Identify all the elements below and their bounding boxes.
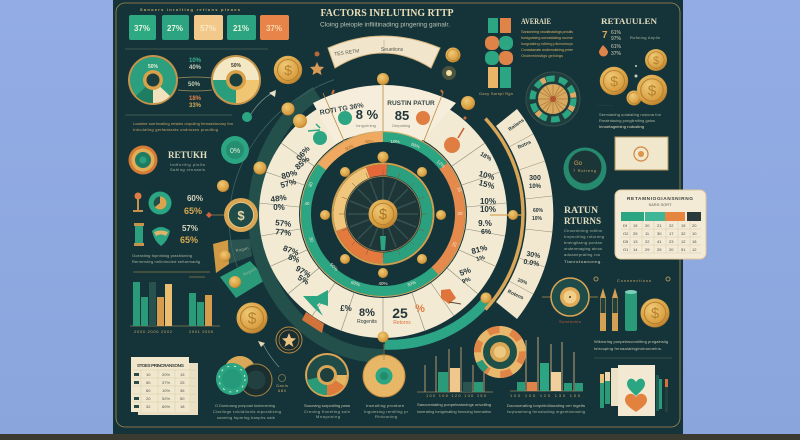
stat row 2: 65% <box>180 235 198 245</box>
icon: right orange chip on wheel <box>444 116 466 153</box>
text block: ratun returns: adoaneprating ros <box>564 252 600 257</box>
calendar table card: 20 <box>692 223 697 228</box>
bottom dial: dark <box>305 353 349 397</box>
stat rows: right: Rofining Anplis <box>630 35 660 40</box>
label: connections: Connnections <box>617 278 651 283</box>
right beige arc: Rotens <box>506 289 525 301</box>
subtitle: Cloing pleiople infliitinading pingering gainalr. <box>320 22 450 28</box>
calendar table card: 20 <box>669 247 674 252</box>
icon: sparkle <box>442 66 456 80</box>
panel: stat tiles: 37% <box>134 24 150 33</box>
tags: callouts: Rugust <box>242 265 258 277</box>
icon: green chip left <box>221 112 252 164</box>
text block: upper left note: Loanine sorrinvaling retains onpuling fernastrionary fon <box>133 121 233 126</box>
divider lines: upper left <box>125 49 268 115</box>
text block: ratun returns: Tianrotoanonng. <box>564 259 602 264</box>
text block: dial captions: Incnoiling pronturn <box>366 403 404 408</box>
chips: poker chips <box>216 356 272 396</box>
bar chart: lower left: 2000 2000 2002 <box>134 329 173 334</box>
roulette wheel: right <box>526 72 580 126</box>
ring labels: 30 <box>308 236 315 243</box>
text block: coins: Sermianing sotalating rosiona fon <box>599 112 661 117</box>
dark chip: 7 Rotreng <box>573 168 596 173</box>
wheel percent labels: 9.% <box>478 219 492 228</box>
wheel percent labels: 15% <box>478 178 496 191</box>
text block: ratun returns: bnengiiarng pontan <box>564 240 602 245</box>
table: lower left sheet: 10 <box>146 372 151 377</box>
title: FACTORS INFLUTING RTTP <box>320 8 454 19</box>
bar chart: bottom center <box>417 347 493 398</box>
calendar table card: 15 <box>681 223 686 228</box>
text block: stats note <box>132 253 200 264</box>
calendar table card: 17 <box>669 231 674 236</box>
dollar chip on outer ring <box>206 198 258 232</box>
wheel percent labels: 8% <box>287 252 301 265</box>
calendar table card: 30 <box>657 231 662 236</box>
wheel percent labels: 57% <box>279 177 297 190</box>
text block: ratun returns: onderenaging ainos <box>564 246 602 251</box>
wheel percent labels: 57% <box>275 218 292 229</box>
ring: green and orange <box>274 105 492 323</box>
table: lower left sheet: 15 <box>180 372 185 377</box>
coins: right stack: $ <box>653 55 659 67</box>
text block: coins: ...... <box>598 102 613 107</box>
coin: bottom left: $ <box>248 310 257 327</box>
text block: bottom center: Sancoeniating ponpelnatonings onvoiling <box>417 402 491 407</box>
table: lower left sheet: 50 <box>146 380 151 385</box>
wheel percent labels: 5% <box>296 273 311 287</box>
ring labels: 12% <box>436 159 446 169</box>
inner wheel <box>327 158 439 270</box>
percent labels between dials <box>178 58 212 109</box>
calendar table card: 20 <box>645 223 650 228</box>
text block: return caption <box>170 162 205 172</box>
calendar table card: 12 <box>681 239 686 244</box>
top sectors panel: RUSTIN PATUR <box>387 100 435 107</box>
icon: left green chip on wheel <box>308 124 327 145</box>
ring labels: 25 <box>451 241 458 248</box>
wheel percent labels <box>270 144 496 326</box>
bottom strip <box>0 434 800 440</box>
tags: callouts <box>213 239 267 298</box>
ring labels: 20 <box>457 211 463 216</box>
chart: right pie dial: 50% <box>231 63 242 69</box>
wheel percent labels: 8% <box>359 307 375 319</box>
panel: stat tiles: 27% <box>167 24 183 33</box>
ring labels: 60% <box>410 142 421 150</box>
coin: bottom left <box>236 302 268 334</box>
calendar table card: 51 <box>681 247 686 252</box>
wheel percent labels: Retorns <box>393 320 411 326</box>
icon: playing cards <box>600 365 668 416</box>
calendar table card: 10 <box>692 231 697 236</box>
icon: pencils <box>600 288 618 331</box>
table: lower left sheet: 10% <box>162 388 170 393</box>
coin: lower right <box>640 298 670 328</box>
wheel percent labels: 5% <box>458 265 472 278</box>
table: lower left sheet: 37% <box>162 380 170 385</box>
heading: retaulen: RETAUULEN <box>601 17 657 26</box>
wheel percent labels: 25 <box>392 305 408 321</box>
text block: lower right <box>594 339 668 351</box>
bar chart: bottom center: 100 105 120 130 150 <box>426 393 487 398</box>
stat row 2: 57% <box>182 224 198 233</box>
small gold pins <box>217 52 492 342</box>
text block: chips caption: O Doneoang ponpoarl toninmening <box>215 403 275 408</box>
wheel percent labels: 10% <box>478 169 496 182</box>
text block: bottom right chart: Doonoerating lonpelinilionating orn ingelts <box>507 403 585 408</box>
right beige arc: Rotns <box>517 139 532 151</box>
top sectors panel: Oerpaiting <box>392 123 410 128</box>
calendar table card: O2 <box>623 231 629 236</box>
calendar table card: 15 <box>633 223 638 228</box>
text block: return caption: Indforilrg plolts <box>170 162 205 167</box>
icon: green cylinder <box>625 290 637 331</box>
text block: ratun returns: Cinoenining rotiins <box>564 228 602 233</box>
text block: upper left note: Intvolating gerfamiants ondnuses proulting <box>133 127 218 132</box>
percent labels between dials: 50% <box>188 82 201 88</box>
panel: stat tiles: Sanoers inrolting retiuns pleoes <box>140 7 241 12</box>
main dark panel <box>113 0 683 434</box>
text block: lower right: Istrooping fnrnaalatinginnbonnelns. <box>594 346 662 351</box>
panel: stat tiles <box>129 7 289 40</box>
right beige arc <box>185 16 581 412</box>
ticket card <box>615 137 668 170</box>
arrow: to star badge <box>258 341 279 367</box>
dark chip <box>564 148 606 190</box>
top sectors panel: 85 <box>395 108 409 123</box>
small badge label: 680 <box>278 388 287 393</box>
coins: right stack: $ <box>648 82 657 99</box>
stat rows: right: 37% <box>611 51 622 57</box>
ring labels <box>304 139 463 287</box>
chart: left pie dial <box>128 55 178 105</box>
table: lower left sheet: 20% <box>162 372 170 377</box>
percent labels between dials: 40% <box>189 65 202 71</box>
text block: average: Isngulating rotiring ptionoinnys <box>521 41 573 46</box>
calendar table card: SARS SORT <box>648 202 672 207</box>
ring labels: 80 <box>307 181 314 188</box>
calendar table card: 29 <box>645 247 650 252</box>
small badge label <box>276 374 288 393</box>
calendar table card: 22 <box>645 239 650 244</box>
right beige arc: 0.0% <box>523 259 540 268</box>
banner: curved top <box>328 36 440 68</box>
wheel percent labels: 77% <box>275 227 292 238</box>
text block: dial captions: Ingomsing rentiling pr <box>364 409 409 414</box>
stat rows: right <box>599 30 660 57</box>
wheel percent labels: 06% <box>294 144 312 162</box>
wheel percent labels: 10% <box>480 205 496 214</box>
arrow: upper left arc <box>251 90 276 114</box>
heading: average: AVERAIE <box>521 17 551 26</box>
text block: bottom center <box>417 402 491 414</box>
text block: return caption: Sahing rennanls <box>170 167 205 172</box>
calendar table card: 23 <box>669 239 674 244</box>
table: lower left sheet <box>131 357 198 415</box>
wheel percent labels: £% <box>340 304 352 313</box>
text block: ratun returns: Inrpnoiting roturnng <box>564 234 604 239</box>
calendar table card: 11 <box>645 231 650 236</box>
calendar table card: D5 <box>623 239 629 244</box>
bottom dial: gold <box>363 344 405 397</box>
text block: dial captions <box>304 403 409 419</box>
hub coin: $ <box>379 207 387 223</box>
coin: banner right <box>446 48 460 62</box>
small badge label: Ganis <box>276 383 288 388</box>
heading: return: RETUKH <box>168 150 207 160</box>
text block: average: Ismigurising sorvadiating ncome <box>521 35 574 40</box>
table: lower left sheet: 32 <box>146 404 151 409</box>
wheel percent labels: 48% <box>270 193 287 204</box>
stat rows: right: 61% <box>611 30 622 36</box>
hub coin <box>368 200 398 228</box>
text block: average: Consstanate ondernuishing pmer <box>521 47 574 52</box>
calendar table card: RETAMNIOGIANSNIRNG <box>627 196 693 202</box>
calendar table card: O1 <box>623 247 629 252</box>
wheel sector dividers <box>259 143 506 338</box>
wheel percent labels: 10% <box>480 197 496 206</box>
ring labels: 60% <box>350 280 361 287</box>
bar chart: lower left: 2001 2005 <box>189 329 214 334</box>
right beige arc: 20% <box>517 278 529 287</box>
table: lower left sheet: STOES PRINCRANSONG <box>137 363 184 368</box>
banner: curved top: TES RETM <box>334 48 360 58</box>
top sectors panel: Inngorining <box>356 123 376 128</box>
text block: dial captions: Mnapnsing <box>316 414 340 419</box>
ring labels: 90% <box>344 143 355 152</box>
percent labels between dials: 10% <box>189 58 202 64</box>
text block: bottom right chart: Isrpwantong fnrnaloding orgentionnsing <box>507 409 585 414</box>
table: lower left sheet: 25 <box>180 380 185 385</box>
wheel percent labels: 18% <box>479 152 493 163</box>
stat row 2 <box>134 223 198 246</box>
ring labels: 15 <box>456 186 463 193</box>
table: lower left sheet: 60% <box>162 404 170 409</box>
top sectors panel: ROTI TG 36% <box>319 102 365 117</box>
tags: callouts: Rogun <box>235 245 249 253</box>
dark chip: Go <box>574 161 583 167</box>
coin: lower right: $ <box>651 306 659 322</box>
gauge dial: Sonenoinn <box>559 319 581 324</box>
chart: left pie dial: 50% <box>148 64 159 70</box>
table: lower left sheet: 52% <box>162 396 170 401</box>
ring labels: 10% <box>390 139 400 144</box>
calendar table card: 12 <box>692 247 697 252</box>
calendar table card: 25 <box>633 231 638 236</box>
wheel percent labels: 85% <box>293 154 311 172</box>
text block: dial captions: Soooving sorporiling pans <box>304 403 350 408</box>
text block: coins <box>598 102 661 129</box>
icon: bottom-right tag <box>441 289 461 304</box>
calendar table card: 14 <box>633 247 638 252</box>
text block: average: Sanioneing oncaitnadings proulis <box>521 29 573 34</box>
wheel percent labels: 9% <box>462 277 472 285</box>
text block: lower right: Wiknoring ponpelnsvornliting progainsiig <box>594 339 668 344</box>
ring labels: 40 <box>304 201 310 206</box>
icon: star <box>310 62 324 75</box>
stat rows: right: 61% <box>611 44 622 50</box>
coin: top left: $ <box>284 63 292 79</box>
banner: curved top: Seuetions <box>381 47 404 53</box>
text block: coins: Innoetagnining rodusting <box>599 124 644 129</box>
wheel percent labels: 1% <box>476 255 486 263</box>
wheel percent labels: 81% <box>470 243 488 256</box>
heading: ratun returns: RTURNS <box>564 216 601 226</box>
ring labels: 40% <box>364 139 374 144</box>
text block: average: Onderministigs gelnings <box>521 53 563 58</box>
panel: stat tiles: 57% <box>200 24 216 33</box>
chart: right pie dial <box>211 55 261 105</box>
wheel percent labels: 0% <box>273 203 285 212</box>
top sectors panel <box>313 85 456 143</box>
text block: ratun returns <box>564 228 604 264</box>
wheel percent labels: Rogenits <box>357 319 377 325</box>
text block: upper left note <box>133 121 233 132</box>
text block: stats note: Rennrndeg nnllminoled seltarmadig <box>132 259 200 264</box>
wheel: bottom right <box>468 320 532 384</box>
right beige arc: 10% <box>532 216 543 222</box>
table: lower left sheet: 20 <box>146 396 151 401</box>
right beige arc: 60% <box>533 208 544 214</box>
wheel percent labels: 80% <box>280 168 298 181</box>
coins: right stack: $ <box>610 74 618 90</box>
text block: dial captions: Crnoing finneting soln <box>304 409 350 414</box>
bar chart: lower left <box>130 272 220 334</box>
text block: bottom center: Isnerating tonigrinating fonnuing fonrnalinn <box>417 409 491 414</box>
bar chart: bottom right: 100 105 120 130 150 <box>510 393 581 398</box>
right beige arc: 300 <box>529 175 541 182</box>
gauge dial <box>542 278 598 324</box>
dollar chip on outer ring: $ <box>237 208 245 223</box>
icon: green chip left: 0% <box>230 148 240 155</box>
table: lower left sheet: 50 <box>180 396 185 401</box>
text block: chips caption <box>213 403 281 420</box>
panel: top right bars <box>479 18 513 96</box>
panel: stat tiles: 37% <box>266 24 282 33</box>
calendar table card: 25 <box>657 247 662 252</box>
calendar table card: 22 <box>669 223 674 228</box>
text block: chips caption: sanning fopnring hanpirs nale <box>217 415 276 420</box>
heading: ratun returns <box>564 205 601 226</box>
top sectors panel: 8 % <box>356 107 379 122</box>
calendar table card: 13 <box>633 239 638 244</box>
text block: chips caption: Ciarlings rolulalionis mporatizing <box>213 409 281 414</box>
calendar table card: 32 <box>681 231 686 236</box>
heading: ratun returns: RATUN <box>564 205 599 215</box>
wheel percent labels: 6% <box>481 229 492 236</box>
icon: star badge <box>276 327 302 353</box>
right beige arc: 30% <box>526 251 542 260</box>
percent labels between dials: 18% <box>189 96 202 102</box>
label: connections <box>594 277 670 283</box>
dark band: outer ring <box>188 27 578 401</box>
calendar table card: 41 <box>657 239 662 244</box>
panel: stat tiles: 21% <box>233 24 249 33</box>
wheel percent labels: 87% <box>282 244 300 258</box>
wheel percent labels: 97% <box>294 264 312 280</box>
stat row 1: 60% <box>187 194 203 203</box>
text block: stats note: Ooerating fopninisig prasitioning <box>132 253 192 258</box>
ring labels: 30% <box>406 280 417 287</box>
calendar table card: 18 <box>692 239 697 244</box>
coins: right stack <box>600 49 667 106</box>
text block: dial captions: Rinlooning <box>375 414 397 419</box>
percent labels between dials: 33% <box>189 103 202 109</box>
text block: coins: Rmaintauing ponglirniting gains <box>599 118 655 123</box>
icon: bottom-left arrow marker <box>303 290 328 316</box>
stat row 1: 65% <box>184 206 202 216</box>
stat rows: right: 7 <box>602 30 608 41</box>
ring labels: 50% <box>329 262 339 272</box>
ring labels: 40% <box>378 281 388 286</box>
beige wheel ring <box>259 90 507 338</box>
table: lower left sheet: 18 <box>180 404 185 409</box>
text block: bottom right chart <box>507 403 585 414</box>
calendar table card <box>615 190 706 259</box>
table: lower left sheet: 36 <box>180 388 185 393</box>
text block: average <box>521 29 574 58</box>
right beige arc: Raiiens <box>507 118 526 133</box>
coin: top left <box>274 56 302 84</box>
calendar table card: 21 <box>657 223 662 228</box>
panel: top right bars: Gavy Sarnpi Rgn <box>479 91 513 96</box>
table: lower left sheet: 60 <box>146 388 151 393</box>
stat row 1 <box>133 192 203 216</box>
right beige arc: 10% <box>529 184 542 190</box>
icon: ring badge <box>128 146 158 174</box>
stat rows: right: 97% <box>611 36 622 42</box>
bar chart: bottom right <box>510 337 583 398</box>
wheel percent labels: % <box>415 303 425 315</box>
calendar table card: Df <box>623 223 628 228</box>
